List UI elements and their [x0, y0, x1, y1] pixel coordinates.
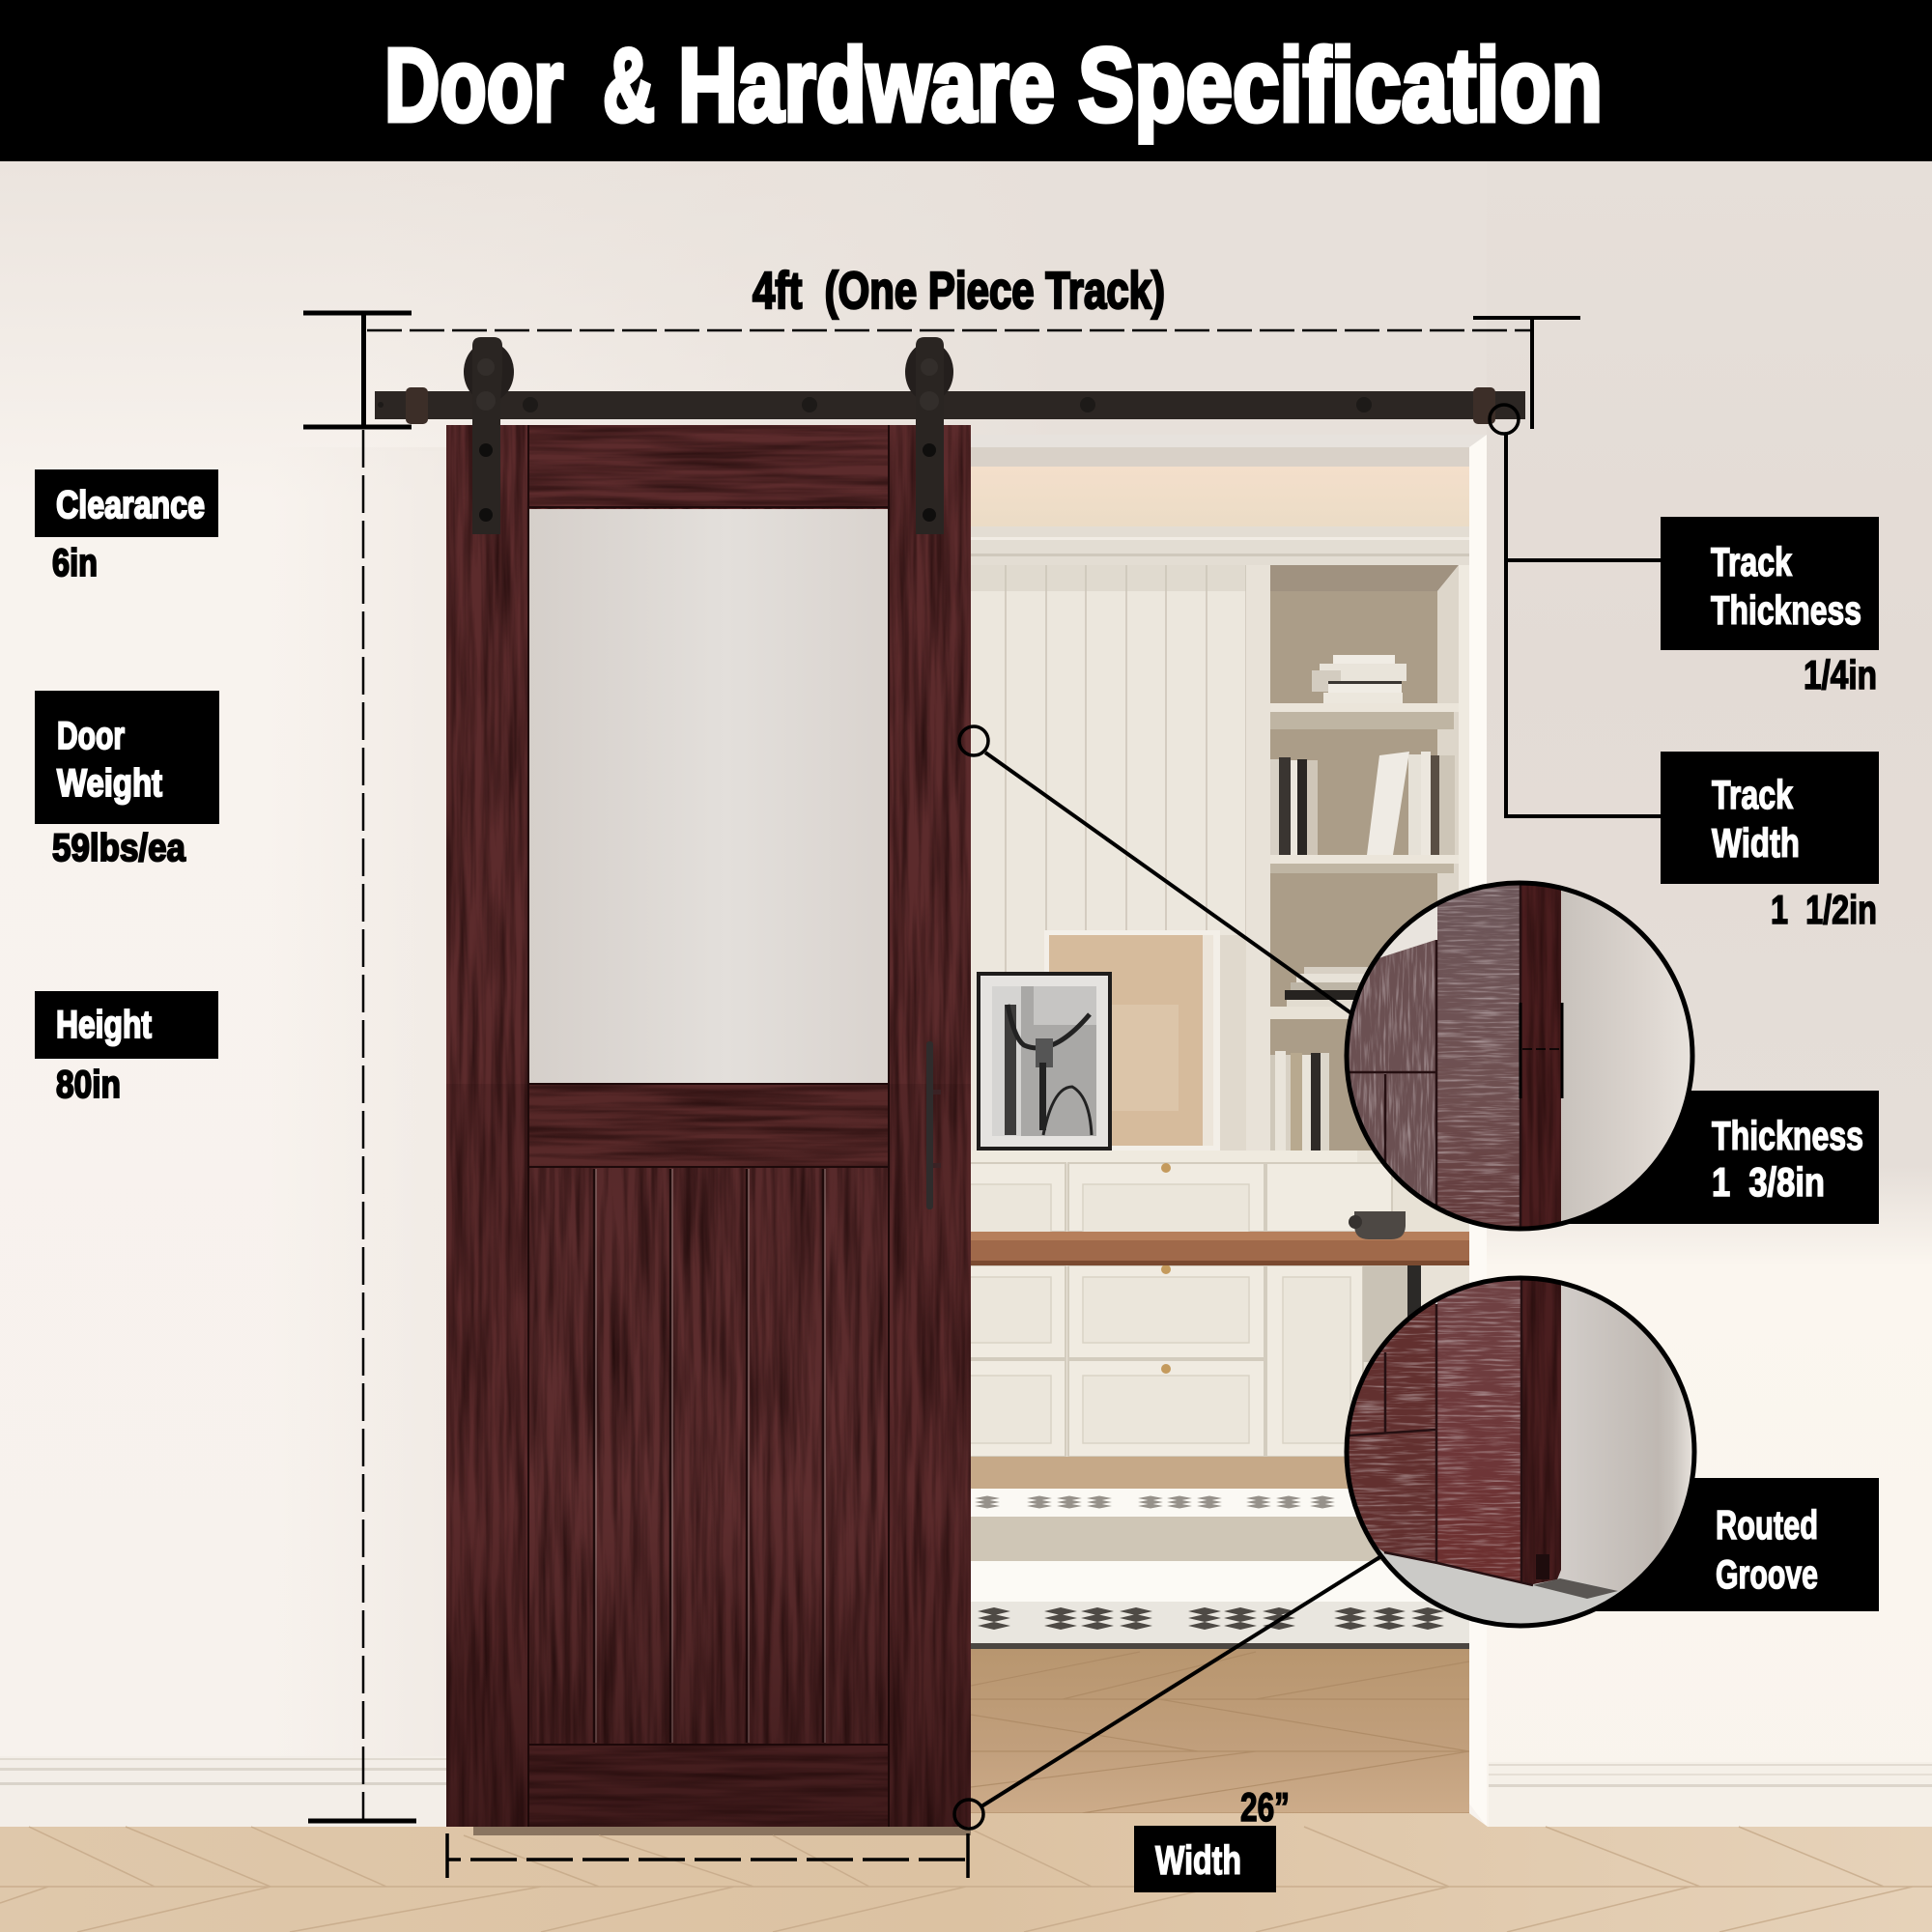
label: track width: Width [1712, 820, 1800, 866]
doorway wall return [971, 435, 1487, 1827]
label: clearance: 6in [52, 542, 98, 584]
detail circle: routed groove [1343, 1275, 1700, 1633]
label: door weight: 59lbs/ea [52, 827, 186, 869]
ceiling light [971, 467, 1469, 526]
label: height [35, 991, 218, 1106]
routed groove notch [1536, 1554, 1549, 1579]
framed bicycle photo [977, 972, 1112, 1151]
label: width: Width [1155, 1837, 1241, 1883]
interior floor and rug [971, 1457, 1469, 1815]
rug diamonds top row [975, 1495, 1335, 1509]
door bottom shading [446, 1084, 971, 1827]
lower panel wood [1343, 1275, 1435, 1563]
stile wood [1437, 879, 1520, 1236]
label: door weight [35, 691, 219, 869]
track length label: 4ft (One Piece Track) [753, 262, 1165, 320]
rug diamonds bottom row [978, 1607, 1444, 1630]
door edge [1520, 1275, 1561, 1584]
cup on table [1349, 1211, 1406, 1239]
label: clearance: Clearance [56, 484, 205, 526]
crown molding [971, 526, 1469, 565]
label: track thickness: Track [1711, 539, 1792, 584]
label: height: Height [56, 1004, 152, 1046]
label: routed groove [1565, 1478, 1879, 1611]
cream cabinets [956, 1151, 1469, 1460]
label: thickness: 1 3/8in [1712, 1159, 1825, 1205]
title: Door [384, 26, 563, 143]
baseboard [0, 1756, 1932, 1827]
floor [0, 1813, 1932, 1932]
track stoppers [406, 387, 1495, 424]
bookcase [1246, 565, 1469, 1164]
door edge [1520, 879, 1561, 1236]
stile wood [1437, 1275, 1533, 1584]
label: thickness [1565, 1091, 1879, 1224]
hanger left [464, 337, 514, 534]
thickness callout leader [959, 726, 1351, 1013]
floor shadow [1533, 1578, 1618, 1599]
panel wood [1343, 940, 1435, 1236]
title [384, 26, 1603, 143]
track length dimension [367, 262, 1580, 429]
label: width [1134, 1784, 1290, 1892]
interior herringbone seams [971, 1652, 1469, 1813]
label: track width: Track [1712, 772, 1793, 817]
clearance and height dimension [303, 313, 416, 1821]
label: clearance [35, 469, 218, 584]
door pull handle [926, 1041, 941, 1209]
title bar [0, 0, 1932, 161]
title: Hardware [678, 26, 1055, 143]
label: routed groove: Routed [1716, 1502, 1818, 1548]
wall behind door [1560, 1275, 1700, 1608]
label: track thickness [1661, 517, 1879, 697]
label: height: 80in [56, 1064, 121, 1106]
hanger right [905, 337, 953, 534]
routed groove callout leader [954, 1556, 1381, 1829]
wall behind door [1561, 879, 1700, 1236]
books: third shelf and lower shelf [1270, 967, 1368, 1151]
track callout leaders [1490, 405, 1661, 817]
sliding track [375, 387, 1525, 424]
books: top shelf [1312, 655, 1406, 703]
title: & [603, 26, 655, 143]
door width dimension [447, 1833, 968, 1878]
wooden table top [971, 1232, 1469, 1319]
barn door [446, 425, 971, 1827]
frosted glass [528, 509, 889, 1084]
title: Specification [1078, 26, 1603, 143]
label: track thickness: 1/4in [1804, 652, 1877, 697]
label: door weight: Weight [57, 762, 162, 805]
beige art print [1044, 930, 1246, 1151]
plank panel [528, 1167, 889, 1745]
label: track thickness: Thickness [1711, 587, 1861, 633]
detail circle: door thickness [1343, 879, 1700, 1236]
books: second shelf [1270, 752, 1455, 855]
door stiles and rails [446, 425, 971, 1827]
label: door weight: Door [57, 715, 125, 757]
label: width: 26” [1240, 1784, 1290, 1830]
paneled wall [971, 565, 1251, 1164]
interior room scene [956, 467, 1469, 1815]
label: routed groove: Groove [1716, 1551, 1818, 1597]
label: track width [1661, 752, 1879, 932]
label: track width: 1 1/2in [1771, 887, 1877, 932]
label: thickness: Thickness [1712, 1113, 1863, 1158]
